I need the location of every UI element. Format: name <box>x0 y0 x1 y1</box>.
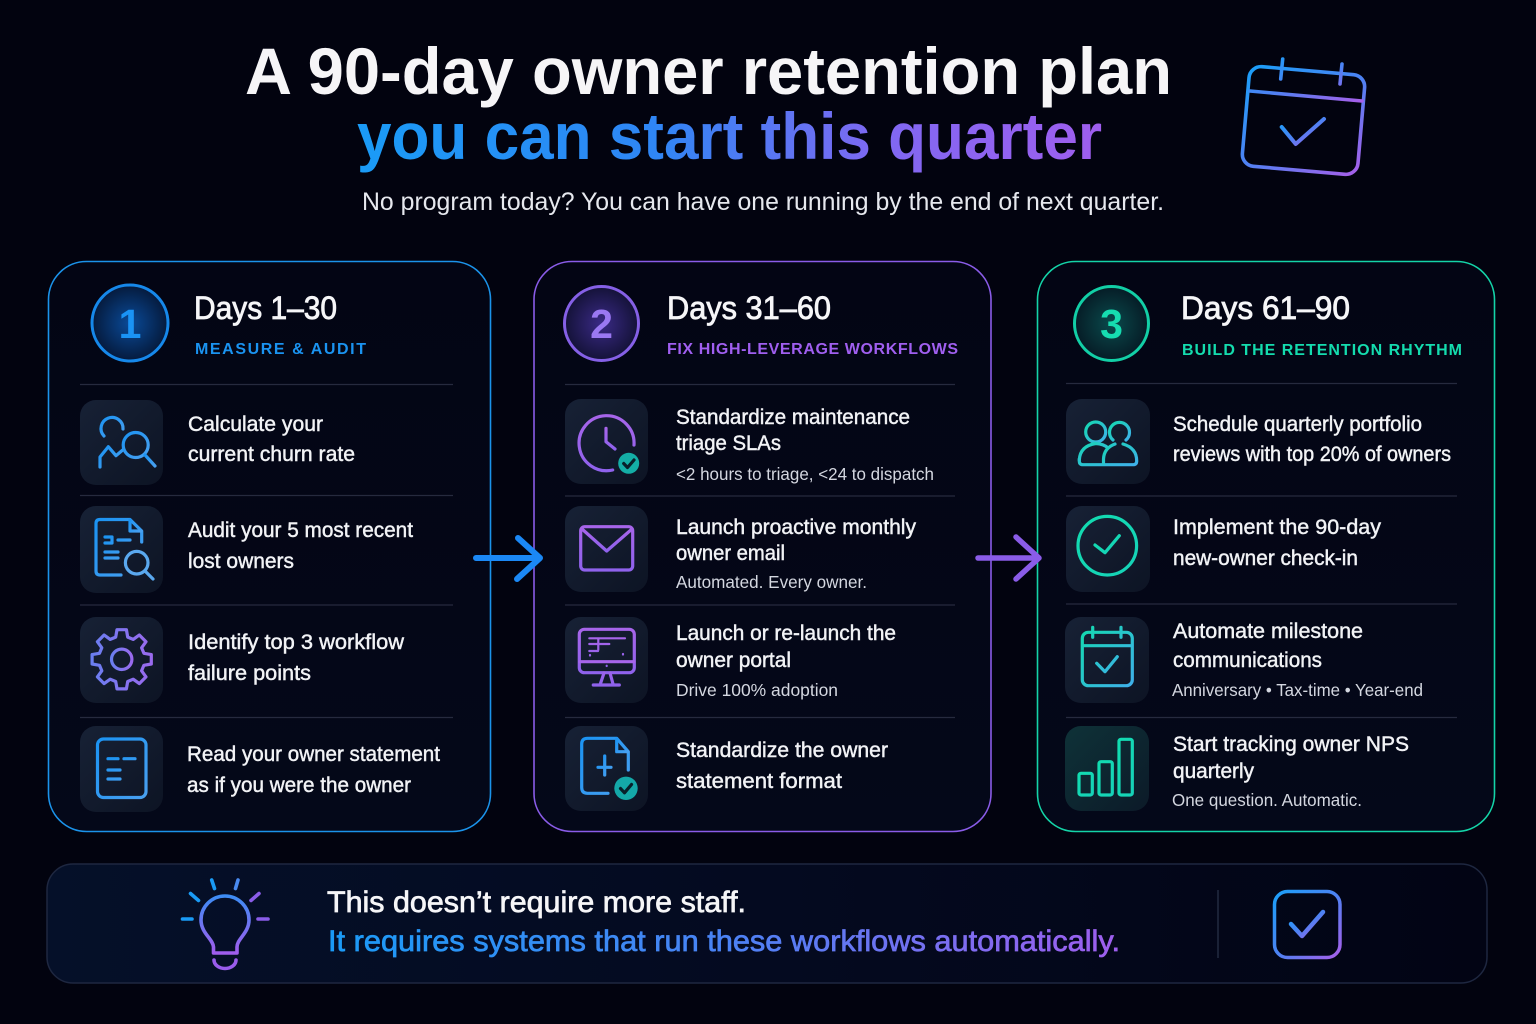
item: churn rate: Calculate your <box>188 412 323 436</box>
item: milestone communications: Anniversary • Tax-time • Year-end <box>1172 680 1423 700</box>
panel: days 1-30 <box>48 262 490 832</box>
banner text: This doesn’t require more staff. <box>327 886 746 919</box>
item: monthly owner email <box>565 506 916 592</box>
icon: envelope <box>581 527 633 570</box>
item: owner portal: owner portal <box>676 648 791 672</box>
arrow: step 1 to 2 <box>476 538 540 579</box>
subtitle: No program today? You can have one running by the end of next quarter. <box>362 188 1164 216</box>
icon: monitor <box>579 629 634 685</box>
icon: search chart <box>100 417 155 467</box>
item: owner statement: Read your owner statement <box>187 742 440 766</box>
heading: days 1-30: Days 1–30 <box>194 290 337 326</box>
icon: bar chart <box>1079 739 1132 795</box>
item: lost owners: Audit your 5 most recent <box>188 518 413 542</box>
item: maintenance triage: triage SLAs <box>676 431 781 455</box>
item: new-owner check-in: Implement the 90-day <box>1173 515 1381 539</box>
icon: light bulb <box>182 880 268 968</box>
item: workflow failure points: Identify top 3 workflow <box>188 630 404 654</box>
label: measure and audit: MEASURE & AUDIT <box>195 341 366 358</box>
icon: gear <box>92 630 151 689</box>
item: statement format: Standardize the owner <box>676 738 888 762</box>
banner text <box>327 886 1120 958</box>
item: workflow failure points <box>80 617 404 703</box>
item: new-owner check-in: new-owner check-in <box>1173 546 1358 570</box>
item: monthly owner email: owner email <box>676 541 785 565</box>
panel: days 31-60 <box>534 262 991 832</box>
item: milestone communications: communications <box>1173 648 1322 672</box>
step badge 1 <box>92 285 168 361</box>
step badge 2: 2 <box>590 301 613 347</box>
item: churn rate: current churn rate <box>188 442 355 466</box>
item: owner NPS: Start tracking owner NPS <box>1173 732 1409 756</box>
item: owner portal: Drive 100% adoption <box>676 680 838 700</box>
icon: document with check <box>582 738 638 800</box>
item: maintenance triage: <2 hours to triage, <24 to dispatch <box>676 464 934 484</box>
heading: days 61-90: Days 61–90 <box>1181 290 1350 326</box>
item: portfolio reviews: Schedule quarterly portfolio <box>1173 412 1422 436</box>
item: workflow failure points: failure points <box>188 661 311 685</box>
title <box>245 34 1172 173</box>
item: statement format <box>565 726 888 811</box>
icon: clock with check <box>579 416 639 474</box>
item: owner statement: as if you were the owner <box>187 773 411 797</box>
item: lost owners: lost owners <box>188 549 294 573</box>
icon: check box <box>1274 892 1340 958</box>
icon: calendar <box>1241 59 1366 175</box>
step badge 3 <box>1074 286 1148 360</box>
item: owner statement <box>80 726 440 812</box>
banner text: It requires systems that run these workflows automatically. <box>328 925 1120 958</box>
item: new-owner check-in <box>1066 506 1381 592</box>
icon: calendar check <box>1082 627 1132 686</box>
icon: statement <box>98 739 146 798</box>
item: lost owners <box>80 506 413 593</box>
item: maintenance triage <box>565 399 934 484</box>
panel: days 61-90 <box>1038 262 1494 832</box>
item: owner NPS: One question. Automatic. <box>1172 790 1362 810</box>
item: milestone communications <box>1065 617 1423 703</box>
item: owner portal: Launch or re-launch the <box>676 621 896 645</box>
title: A 90-day owner retention plan <box>245 34 1172 108</box>
item: portfolio reviews: reviews with top 20% of owners <box>1173 442 1451 466</box>
label: build the retention rhythm: BUILD THE RETENTION RHYTHM <box>1182 342 1462 359</box>
label: fix high-leverage workflows: FIX HIGH-LEVERAGE WORKFLOWS <box>667 341 958 358</box>
step badge 3: 3 <box>1100 301 1123 347</box>
item: monthly owner email: Automated. Every owner. <box>676 572 867 592</box>
arrow: step 2 to 3 <box>978 537 1039 579</box>
callout: bottom banner <box>47 864 1487 983</box>
icon: two people <box>1079 422 1137 465</box>
heading: days 31-60: Days 31–60 <box>667 290 831 326</box>
step badge 1: 1 <box>119 301 141 347</box>
item: statement format: statement format <box>676 769 842 793</box>
title: you can start this quarter <box>357 99 1102 173</box>
item: owner NPS <box>1065 726 1409 811</box>
item: churn rate <box>80 400 355 485</box>
icon: document search <box>96 520 153 579</box>
item: owner portal <box>565 617 896 703</box>
item: monthly owner email: Launch proactive monthly <box>676 515 916 539</box>
step badge 2 <box>564 286 638 360</box>
icon: check circle <box>1078 516 1137 575</box>
item: portfolio reviews <box>1066 399 1451 484</box>
item: maintenance triage: Standardize maintenance <box>676 405 910 429</box>
item: milestone communications: Automate milestone <box>1173 619 1363 643</box>
item: owner NPS: quarterly <box>1173 759 1254 783</box>
